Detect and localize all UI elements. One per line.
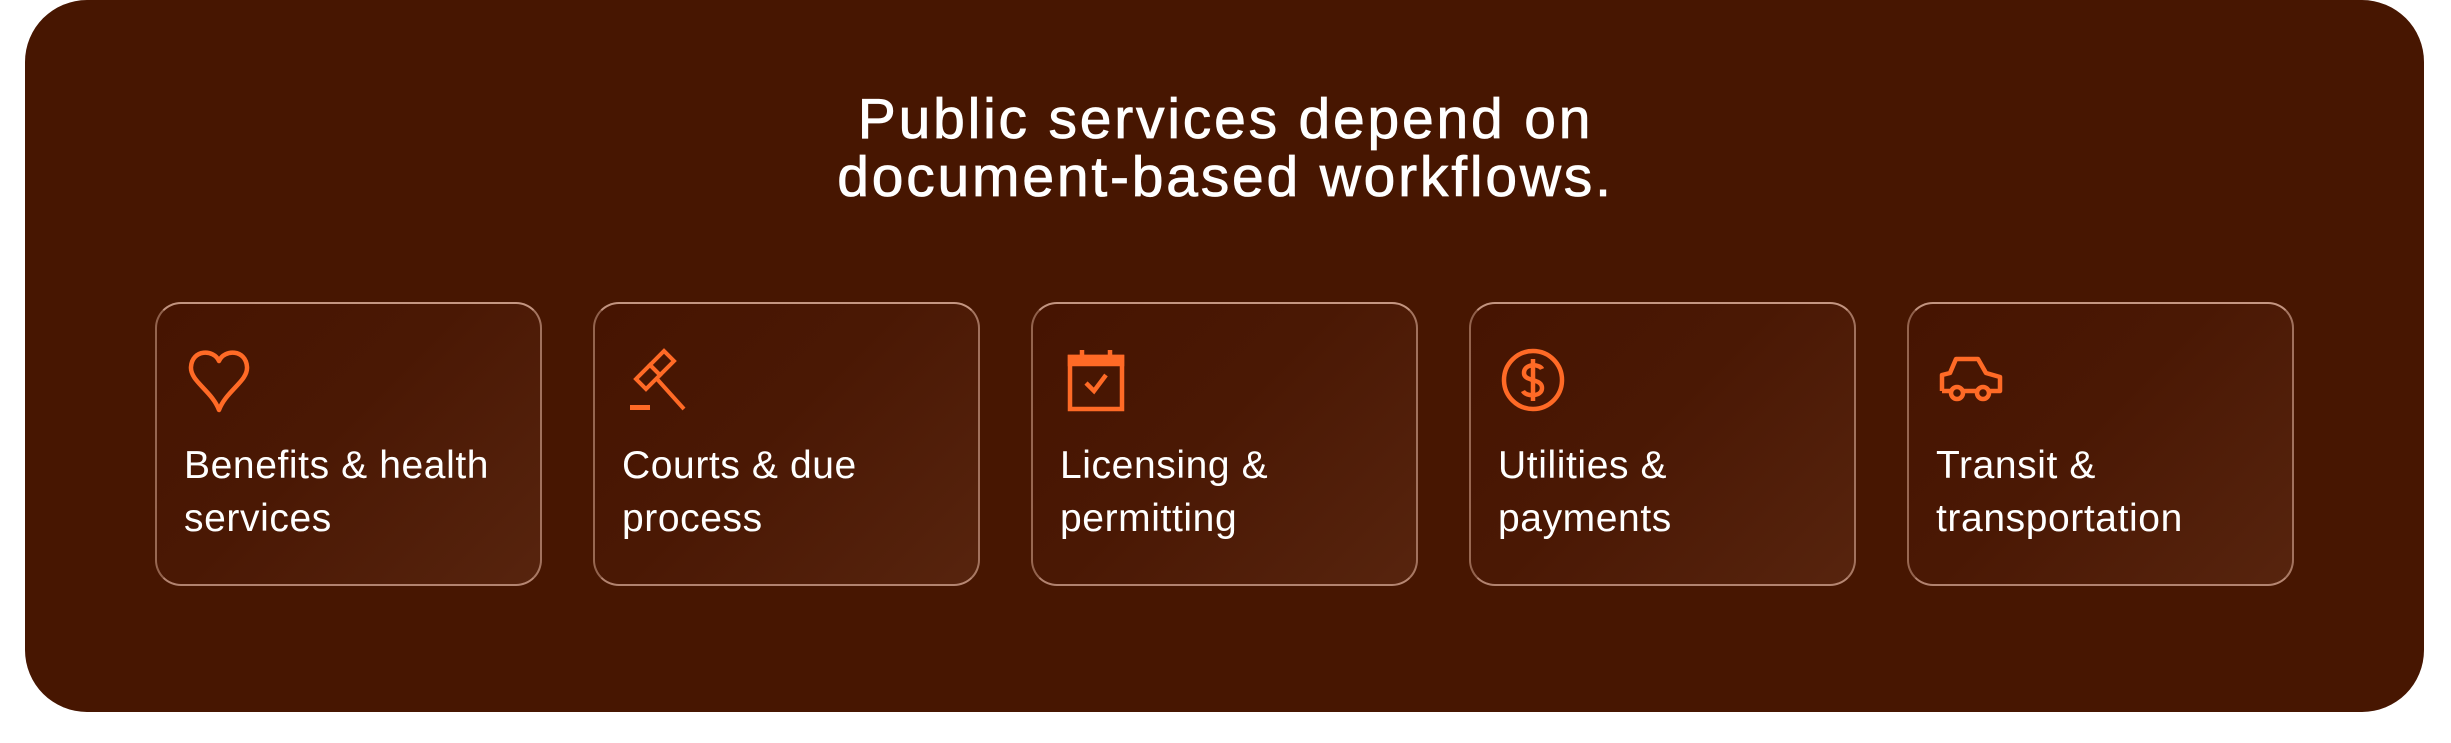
label	[1060, 444, 1268, 540]
card: transit	[1907, 302, 2294, 586]
label: Licensing &	[1060, 444, 1268, 487]
label: permitting	[1060, 497, 1237, 540]
label	[184, 444, 489, 540]
label	[622, 444, 857, 540]
title	[837, 87, 1614, 209]
icon: calendar	[1068, 350, 1124, 412]
label	[1498, 444, 1672, 540]
card: utilities	[1469, 302, 1856, 586]
label	[1936, 444, 2183, 540]
label: Courts & due	[622, 444, 857, 487]
title: document-based workflows.	[837, 145, 1614, 209]
label: transportation	[1936, 497, 2183, 540]
label: services	[184, 497, 332, 540]
label: Benefits & health	[184, 444, 489, 487]
label: payments	[1498, 497, 1672, 540]
title: Public services depend on	[858, 87, 1593, 151]
label: process	[622, 497, 763, 540]
card: courts	[593, 302, 980, 586]
icon: dollar coin	[1502, 348, 1564, 412]
label: Transit &	[1936, 444, 2096, 487]
icon: gavel	[630, 348, 686, 410]
icon: car	[1940, 356, 2002, 402]
card: benefits	[155, 302, 542, 586]
icon: heart	[188, 350, 250, 412]
card: licensing	[1031, 302, 1418, 586]
label: Utilities &	[1498, 444, 1667, 487]
